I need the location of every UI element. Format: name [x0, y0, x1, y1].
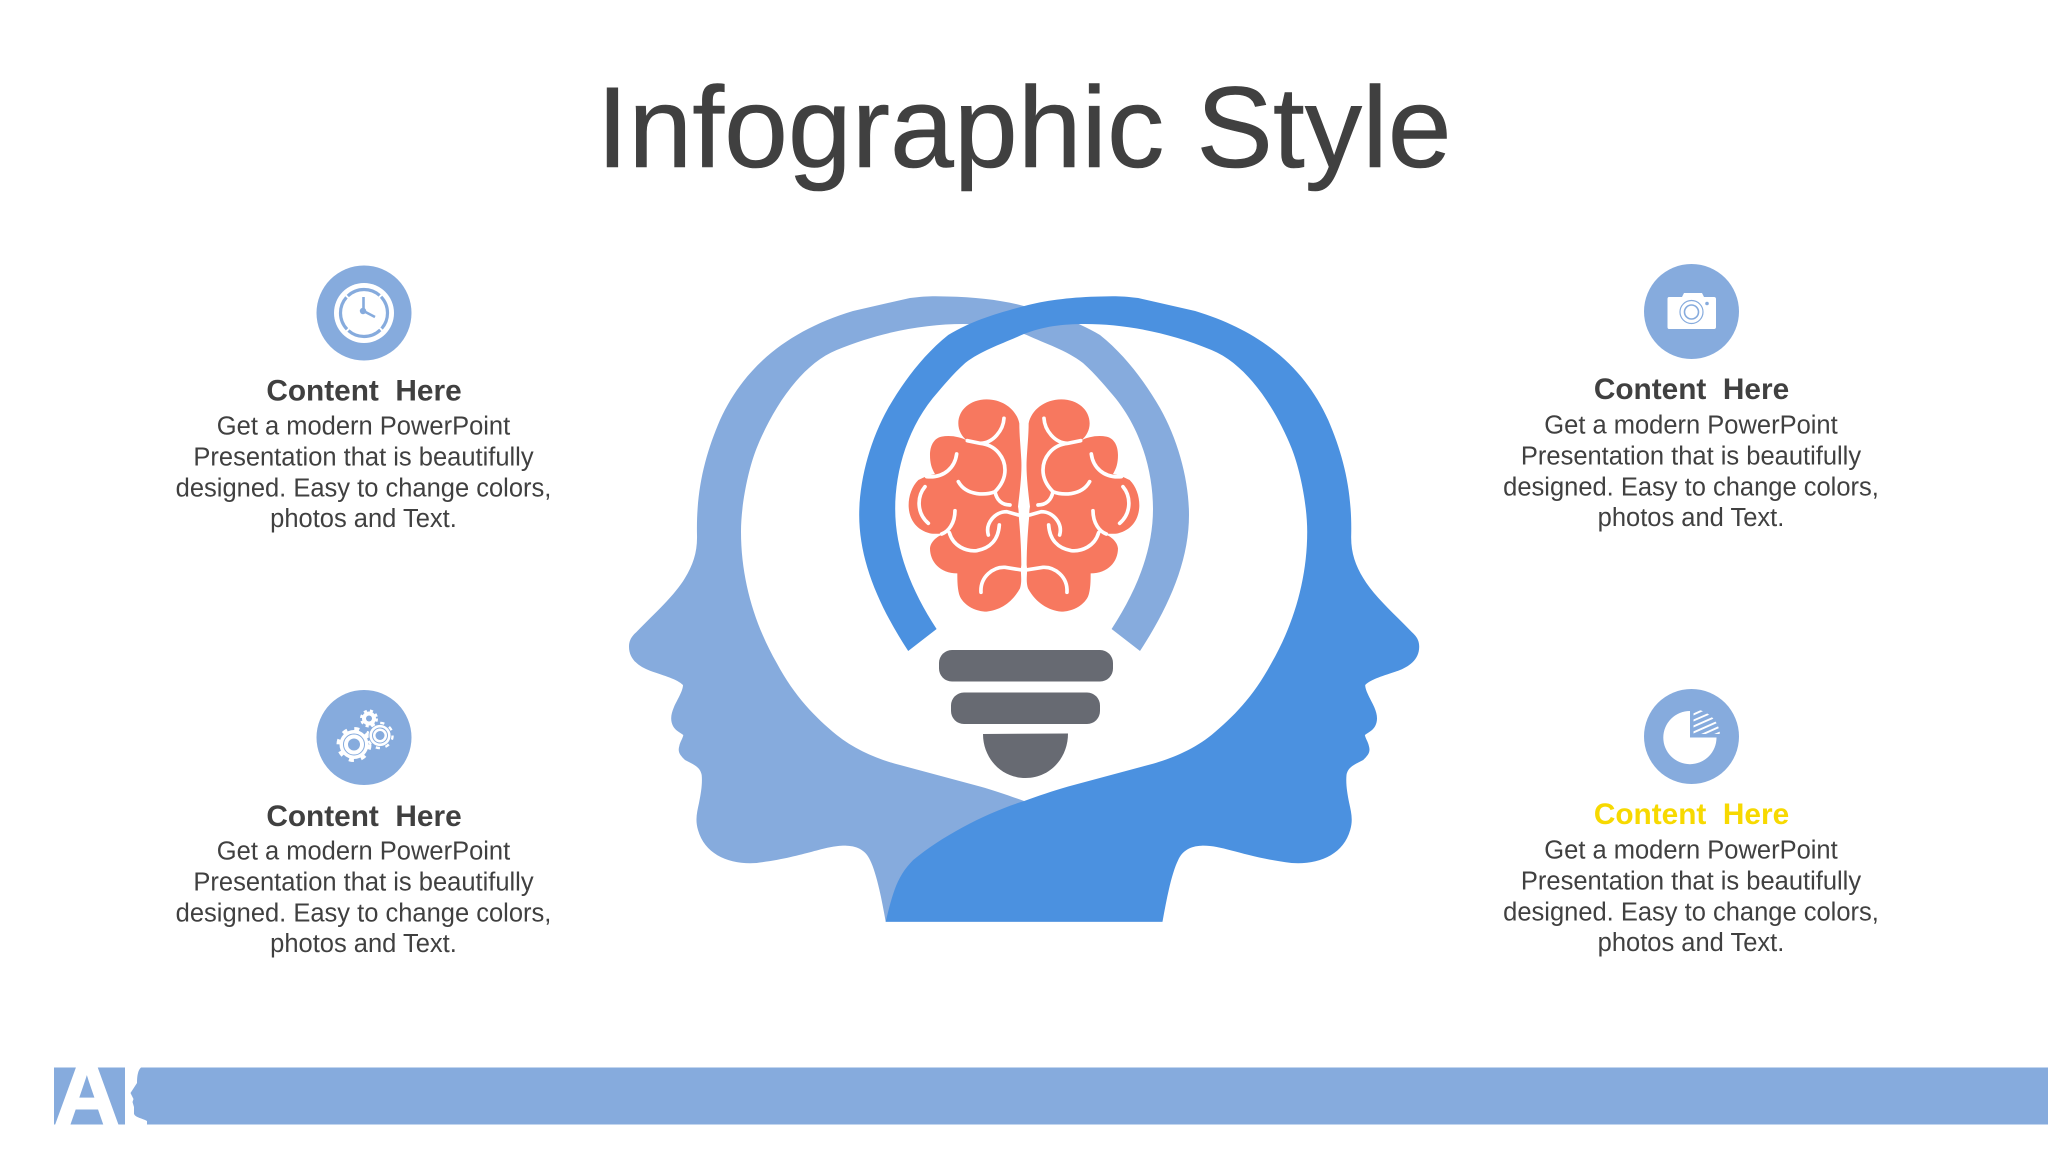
panel: top right	[1503, 264, 1879, 532]
title: Infographic Style	[596, 64, 1452, 192]
panel: bottom left	[176, 690, 551, 958]
right head silhouette	[859, 296, 1419, 922]
heading: Content Here	[1594, 373, 1789, 406]
text block: Presentation that is beautifully	[193, 444, 534, 472]
text block: Get a modern PowerPoint	[217, 412, 510, 440]
text block: Get a modern PowerPoint	[1544, 836, 1838, 864]
text block	[1503, 836, 1879, 957]
text block: designed. Easy to change colors,	[176, 900, 551, 928]
icon: light bulb base	[939, 650, 1113, 778]
footer bar with logo	[54, 1068, 2048, 1124]
text block: designed. Easy to change colors,	[176, 474, 551, 502]
text block: Presentation that is beautifully	[1521, 868, 1861, 896]
icon: clock	[316, 266, 412, 360]
footer bar with logo: A	[54, 1044, 120, 1144]
icon: gears	[316, 690, 412, 785]
text block	[176, 412, 551, 533]
heading: Content Here	[266, 374, 462, 408]
text block: Get a modern PowerPoint	[217, 838, 510, 866]
text block: photos and Text.	[1598, 504, 1784, 532]
text block: Presentation that is beautifully	[193, 868, 534, 896]
text block: photos and Text.	[1598, 929, 1784, 957]
panel: top left	[176, 266, 551, 533]
icon: camera	[1644, 264, 1739, 359]
heading: Content Here	[266, 800, 462, 833]
heading: Content Here	[1594, 798, 1789, 831]
text block: designed. Easy to change colors,	[1503, 898, 1879, 926]
text block: photos and Text.	[270, 505, 457, 533]
panel: bottom right	[1503, 689, 1879, 957]
text block: designed. Easy to change colors,	[1503, 474, 1879, 502]
text block: photos and Text.	[270, 930, 457, 958]
central illustration: two heads with bulb and brain	[629, 296, 1419, 922]
text block: Get a modern PowerPoint	[1544, 412, 1838, 440]
icon: pie chart	[1644, 689, 1739, 784]
icon: brain	[909, 399, 1139, 612]
left head silhouette	[629, 296, 1189, 922]
text block	[176, 838, 551, 958]
text block	[1503, 412, 1879, 532]
text block: Presentation that is beautifully	[1521, 442, 1861, 470]
